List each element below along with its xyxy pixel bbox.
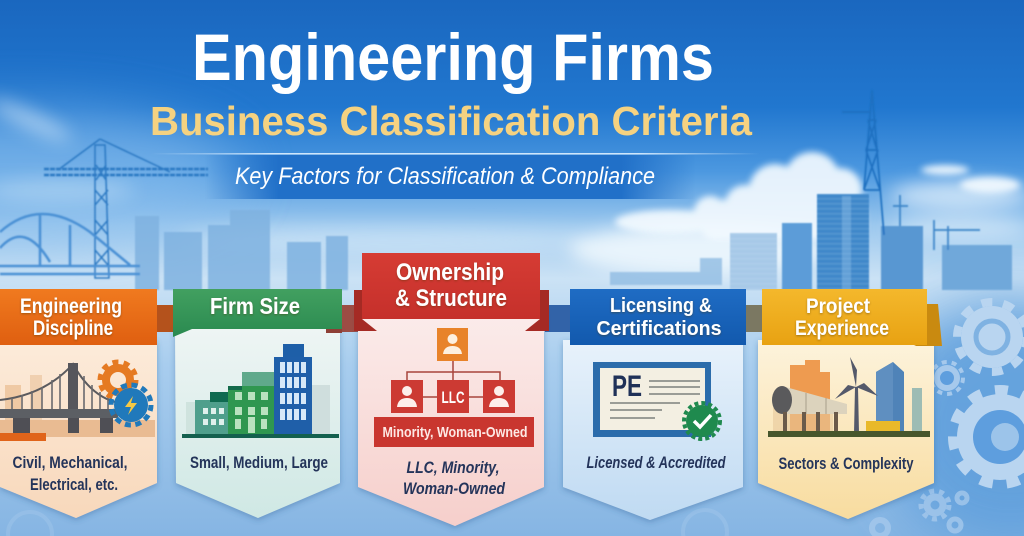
LLC box: LLC [442, 388, 464, 407]
text: disciplines: Civil, Mechanical, [12, 453, 128, 472]
text: disciplines: Electrical, etc. [30, 475, 118, 494]
background skyline right with tower and buildings [610, 90, 1012, 290]
heading: Licensing & [610, 295, 712, 317]
rule under subtitle [150, 153, 760, 154]
ribbon [570, 289, 746, 345]
card body [0, 340, 157, 518]
card body [758, 340, 934, 519]
owner box [437, 328, 468, 361]
heading: & Structure [395, 285, 507, 312]
ribbon [173, 289, 342, 337]
heading: Certifications [596, 318, 722, 340]
panel: firm size [173, 289, 342, 518]
member box right [483, 380, 515, 413]
tagline banner: Key Factors for Classification & Compliance [235, 163, 655, 190]
background skyline left with crane and bridge [0, 139, 348, 290]
title: Engineering Firms [192, 20, 714, 94]
background gears [8, 302, 1024, 536]
label band: minority woman-owned: Minority, Woman-Owned [382, 424, 528, 441]
clouds [0, 94, 1024, 276]
text: disciplines [12, 453, 128, 494]
heading: Engineering [20, 295, 122, 318]
card body [175, 328, 340, 518]
text: licensed: Licensed & Accredited [586, 453, 726, 472]
panel: project experience [758, 289, 942, 519]
icon: PE certificate [593, 362, 720, 439]
heading: Experience [795, 317, 889, 340]
icon: pipeline, turbine and towers [768, 357, 930, 437]
text: ownership types: Woman-Owned [403, 479, 505, 498]
ribbon [0, 289, 157, 345]
subtitle: Business Classification Criteria [150, 98, 753, 144]
heading: Ownership [396, 259, 504, 286]
heading: Project [806, 295, 870, 318]
heading [795, 295, 889, 340]
panel: engineering discipline [0, 289, 157, 518]
tagline banner [205, 155, 695, 199]
label band: minority woman-owned [374, 417, 534, 447]
icon: buildings [182, 344, 339, 438]
heading [20, 295, 122, 340]
text: sizes: Small, Medium, Large [190, 453, 328, 472]
heading [596, 295, 722, 340]
icon: check badge [684, 403, 720, 439]
ribbon connectors [155, 305, 764, 332]
card body [358, 310, 544, 526]
icon: org chart [391, 328, 515, 413]
icon: bridge and gears [0, 362, 155, 441]
heading: Discipline [33, 317, 113, 340]
text: sectors: Sectors & Complexity [778, 454, 914, 473]
icon: PE certificate: PE [612, 370, 642, 403]
member box left [391, 380, 423, 413]
ribbon [354, 253, 549, 331]
heading [395, 259, 507, 312]
panel: licensing and certifications [563, 289, 746, 520]
text: ownership types: LLC, Minority, [406, 458, 500, 477]
text: ownership types [403, 458, 505, 498]
card body [563, 340, 743, 520]
panel: ownership and structure [354, 253, 549, 526]
ribbon [762, 289, 942, 346]
heading: Firm Size [210, 293, 300, 319]
